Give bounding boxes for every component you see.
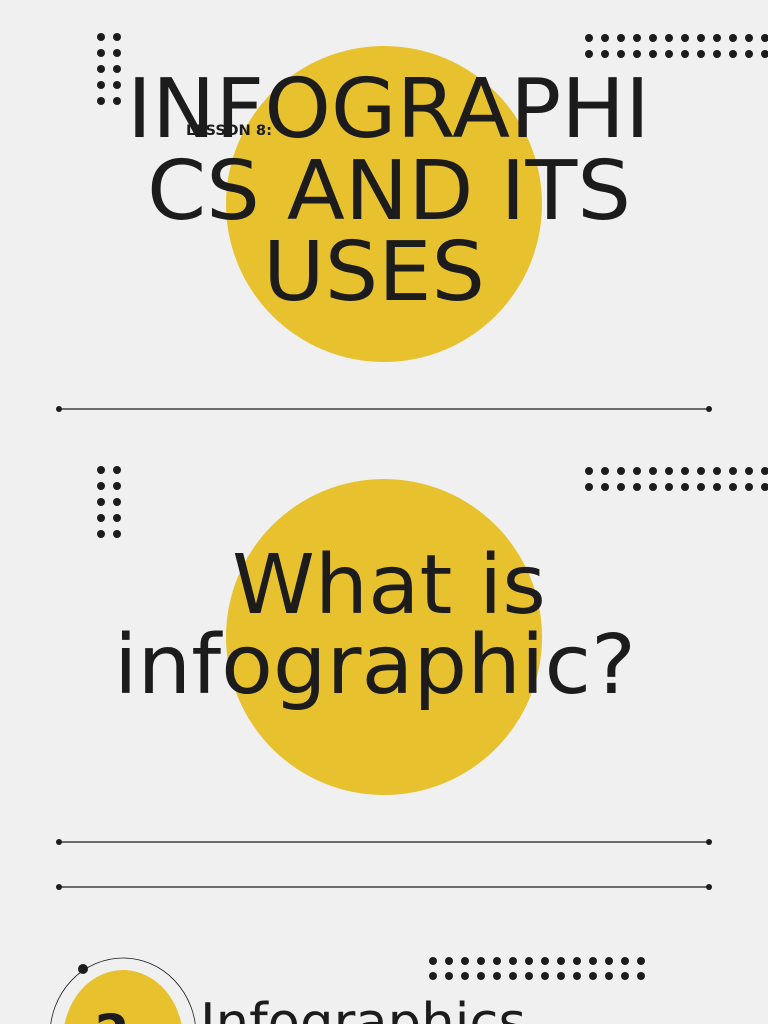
dots: top left: [93, 29, 125, 109]
subtitle: lesson: LESSON 8:: [186, 123, 272, 139]
dots: bottom: [425, 953, 649, 983]
divider 1: [56, 406, 712, 412]
dots: top right: [581, 30, 768, 62]
title: CS AND ITS: [147, 144, 631, 239]
title: INFOGRAPHI: [127, 62, 650, 157]
divider 3: [56, 884, 712, 890]
circle: title background: [226, 46, 542, 362]
dots: second left: [93, 462, 125, 542]
title: USES: [263, 225, 485, 320]
dots: second right: [581, 463, 768, 495]
title: [127, 62, 650, 320]
circle: question background: [226, 479, 542, 795]
heading: what is infographic: What is: [232, 538, 546, 633]
heading: what is infographic: infographic?: [114, 618, 636, 713]
heading: what is infographic: [114, 538, 636, 713]
divider 2: [56, 839, 712, 845]
icon: number badge: [50, 958, 196, 1024]
